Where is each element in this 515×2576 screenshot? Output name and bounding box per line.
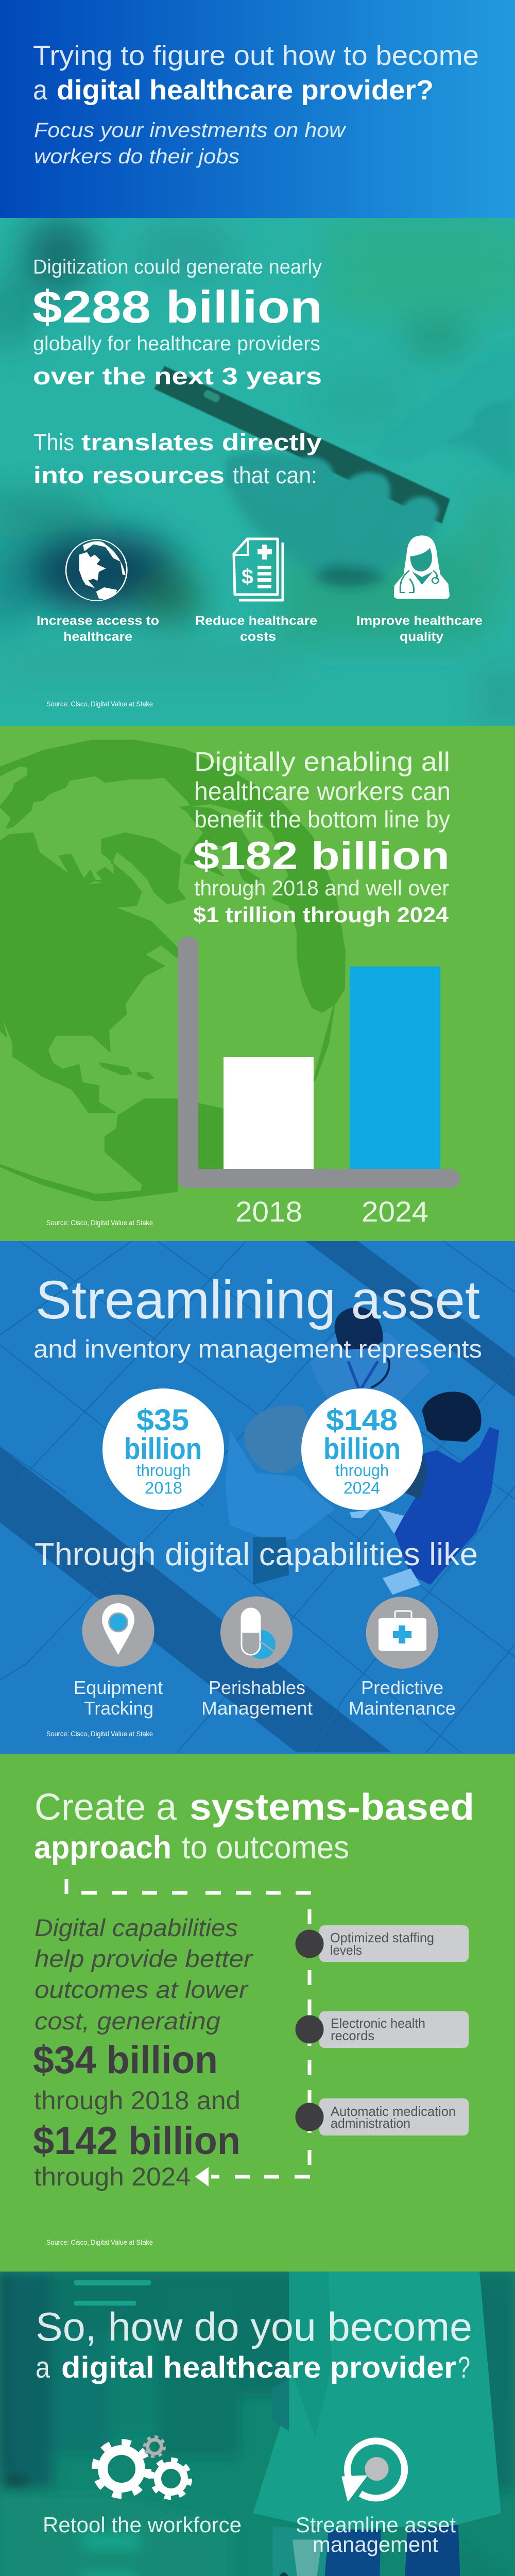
step: optimized staffing: Optimized staffing xyxy=(330,1930,434,1945)
subheading: Focus your investments on how xyxy=(34,119,347,142)
step: electronic health records: Electronic health xyxy=(331,2015,425,2031)
callout: 35 billion: 2018 xyxy=(145,1479,182,1497)
text: digital capabilities value: help provide better xyxy=(35,1945,254,1972)
label: reduce costs xyxy=(195,614,317,644)
text: value statement: $288 billion xyxy=(32,281,322,332)
panel: header xyxy=(0,0,515,218)
heading: systems-based xyxy=(190,1787,474,1828)
text: bottom line statement xyxy=(193,747,451,927)
icon: medical bill xyxy=(234,539,283,600)
text: digital capabilities value: outcomes at lower xyxy=(35,1976,249,2003)
arrow: dashed flow xyxy=(66,1879,311,2187)
callout: 148 billion xyxy=(301,1388,423,1510)
heading: streamlining asset: Streamlining asset xyxy=(36,1270,480,1330)
panel: systems-based approach xyxy=(0,1754,515,2272)
label: predictive maintenance xyxy=(349,1677,456,1719)
text: translates directly: This xyxy=(33,429,74,455)
illustration: globe xyxy=(0,740,345,1200)
photo: gloved hand holding phone xyxy=(0,216,515,726)
heading line 1: Trying to figure out how to become xyxy=(33,40,479,71)
label: streamline asset management xyxy=(296,2513,456,2556)
text: digital capabilities value: cost, generating xyxy=(35,2007,220,2035)
text: digital capabilities value: through 2024 xyxy=(34,2162,191,2191)
icon: doctor xyxy=(394,535,450,599)
text: bottom line statement: healthcare workers can xyxy=(194,777,451,806)
text: value statement: over the next 3 years xyxy=(33,363,322,389)
text: digital capabilities value xyxy=(33,1914,254,2191)
clinician in white coat at top xyxy=(311,1307,431,1411)
step: automatic medication: administration xyxy=(331,2115,410,2131)
source note: Source: Cisco, Digital Value at Stake xyxy=(46,2238,153,2246)
callout: 35 billion: billion xyxy=(124,1432,202,1466)
step: automatic medication: Automatic medication xyxy=(331,2104,456,2119)
photo: clinicians on tiled floor xyxy=(0,1241,515,1752)
label: retool the workforce: Retool the workforce xyxy=(43,2513,242,2537)
bar: 2018 xyxy=(224,1057,314,1169)
label: improve quality: quality xyxy=(400,630,443,644)
heading: through digital capabilities: Through digital capabilities like xyxy=(35,1537,478,1572)
callout: 148 billion: 2024 xyxy=(344,1479,380,1497)
text: digital capabilities value: through 2018 and xyxy=(34,2086,241,2115)
text: translates directly xyxy=(33,429,322,488)
text: bottom line statement: Digitally enabling all xyxy=(194,747,450,777)
icon: globe xyxy=(66,539,127,601)
label: predictive maintenance: Predictive xyxy=(361,1677,443,1698)
clinician in dark scrubs xyxy=(350,1392,499,1595)
icon: gears xyxy=(95,2437,190,2498)
heading: Create a xyxy=(35,1787,177,1828)
source note: Source: Cisco, Digital Value at Stake xyxy=(46,1730,153,1738)
text: value statement xyxy=(32,256,322,389)
text: bottom line statement: benefit the bottom line by xyxy=(194,806,450,833)
text: digital capabilities value: $34 billion xyxy=(33,2038,218,2082)
label: streamline asset management: management xyxy=(313,2532,438,2556)
callout: 35 billion xyxy=(102,1388,224,1510)
bar: 2024 xyxy=(350,967,440,1169)
callout: 35 billion: $35 xyxy=(136,1403,189,1437)
panel: bottom line benefit xyxy=(0,726,515,1241)
heading xyxy=(36,2304,472,2384)
callout: 148 billion: billion xyxy=(323,1432,401,1466)
heading: approach xyxy=(34,1830,171,1866)
label: improve quality xyxy=(356,614,483,644)
source note: Source: Cisco, Digital Value at Stake xyxy=(46,700,153,708)
text: digital capabilities value: $142 billion xyxy=(33,2119,241,2163)
subheading xyxy=(34,119,347,168)
text: value statement: Digitization could generate nearly xyxy=(33,256,322,278)
panel: asset and inventory management xyxy=(0,1241,515,1754)
axis label 2018: 2018 xyxy=(235,1195,302,1228)
subheading: workers do their jobs xyxy=(34,145,239,168)
heading line 2: a xyxy=(33,75,48,106)
callout: 35 billion: through xyxy=(136,1461,191,1480)
step: automatic medication xyxy=(296,2098,469,2136)
clinician with blond hair xyxy=(225,1405,335,1585)
panel: how to become a digital provider xyxy=(0,2272,515,2576)
axis label 2024: 2024 xyxy=(362,1195,428,1228)
label: perishables management: Perishables xyxy=(209,1677,305,1698)
text: translates directly: that can: xyxy=(233,462,317,488)
callout: 148 billion: through xyxy=(335,1461,389,1480)
icon: medical case xyxy=(366,1597,438,1669)
label: streamline asset management: Streamline asset xyxy=(296,2513,456,2537)
text: bottom line statement: $1 trillion through 2024 xyxy=(193,903,449,927)
text: bottom line statement: through 2018 and well over xyxy=(194,876,449,900)
icon: medical bill: $ xyxy=(242,565,253,588)
step: optimized staffing xyxy=(296,1925,469,1962)
icon: refresh loop xyxy=(342,2441,405,2500)
label: increase access: healthcare xyxy=(63,630,132,644)
step: electronic health records: records xyxy=(331,2028,374,2043)
step: optimized staffing: levels xyxy=(330,1942,362,1958)
callout: 148 billion: $148 xyxy=(326,1403,398,1437)
label: improve quality: Improve healthcare xyxy=(356,614,483,628)
icon: pill and chart xyxy=(220,1596,293,1668)
label: equipment tracking: Tracking xyxy=(84,1698,153,1719)
label: predictive maintenance: Maintenance xyxy=(349,1698,456,1719)
heading: So, how do you become xyxy=(36,2304,472,2349)
text: translates directly: translates directly xyxy=(81,429,322,455)
label: equipment tracking: Equipment xyxy=(74,1677,163,1698)
label: reduce costs: costs xyxy=(240,630,276,644)
subheading: and inventory management represents xyxy=(33,1335,482,1363)
bar chart xyxy=(178,937,460,1228)
heading: a xyxy=(36,2351,50,2384)
label: reduce costs: Reduce healthcare xyxy=(195,614,317,628)
chart axes xyxy=(178,937,460,1188)
source note: Source: Cisco, Digital Value at Stake xyxy=(46,1218,153,1227)
heading: ? xyxy=(458,2351,470,2384)
photo: doctor walking down hospital hall xyxy=(0,2272,515,2576)
label: equipment tracking xyxy=(74,1677,163,1719)
step: electronic health records xyxy=(296,2011,469,2048)
panel: digitization value xyxy=(0,216,515,726)
label: perishables management: Management xyxy=(201,1698,313,1719)
heading: to outcomes xyxy=(182,1830,349,1866)
heading line 2: digital healthcare provider? xyxy=(57,75,434,106)
text: value statement: globally for healthcare providers xyxy=(33,333,320,355)
text: bottom line statement: $182 billion xyxy=(193,834,450,878)
heading: digital healthcare provider xyxy=(61,2351,456,2384)
label: perishables management xyxy=(201,1677,313,1719)
label: increase access xyxy=(37,614,159,644)
heading xyxy=(34,1787,474,1866)
text: translates directly: into resources xyxy=(33,462,225,488)
icon: location pin xyxy=(82,1595,154,1667)
label: increase access: Increase access to xyxy=(37,614,159,628)
text: digital capabilities value: Digital capabilities xyxy=(35,1914,238,1941)
